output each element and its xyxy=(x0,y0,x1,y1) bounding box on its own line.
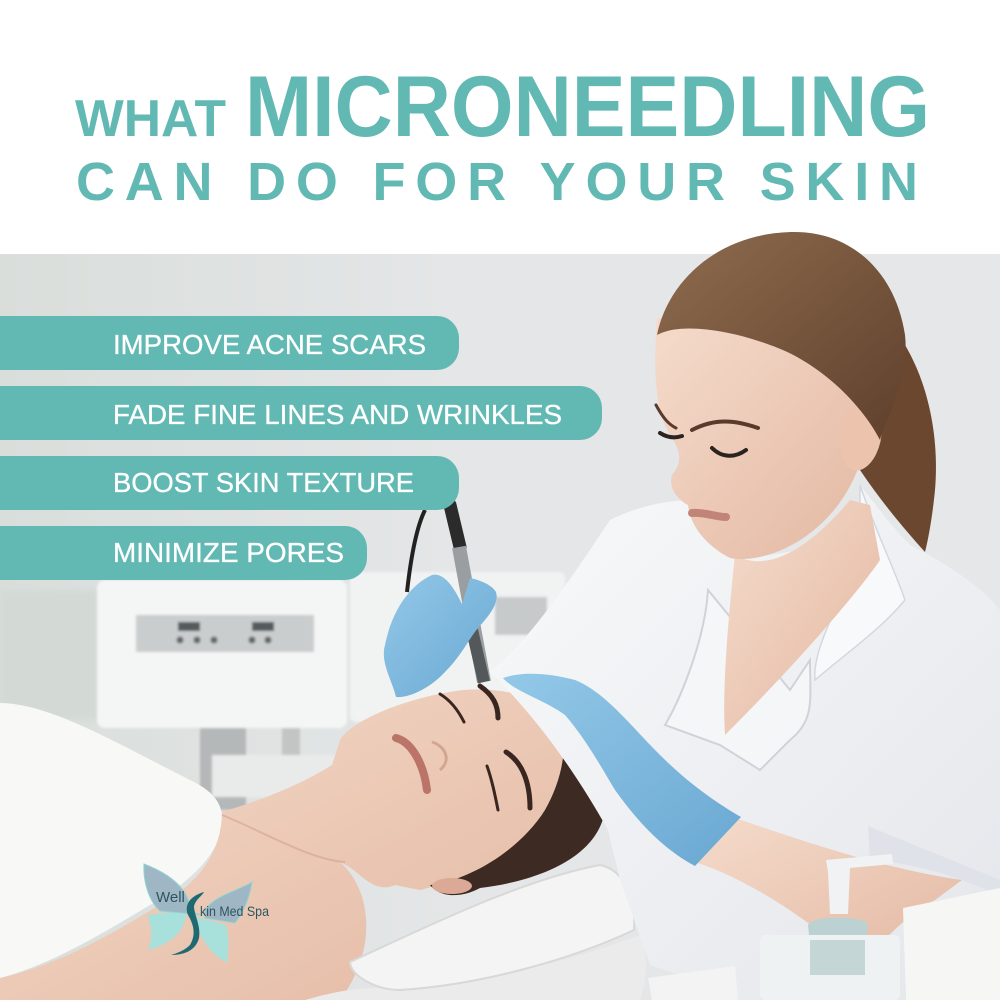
practitioner: eyes, brows and lips xyxy=(656,405,758,517)
logo: Well Skin Med Spa butterfly xyxy=(144,864,269,963)
benefit pill: boost skin texture: BOOST SKIN TEXTURE xyxy=(113,467,414,498)
patient: towel xyxy=(0,703,222,978)
benefit pill: boost skin texture xyxy=(0,456,459,510)
patient: eyes, brows and lips xyxy=(396,686,530,810)
title xyxy=(75,59,930,212)
title: MICRONEEDLING xyxy=(245,59,930,155)
benefit pill: fade fine lines and wrinkles xyxy=(0,386,602,440)
patient: body and face xyxy=(0,686,572,1000)
logo: Well Skin Med Spa butterfly: kin Med Spa xyxy=(200,903,269,919)
practitioner: face xyxy=(655,318,888,559)
photo: treatment scene xyxy=(0,232,1000,1000)
logo: Well Skin Med Spa butterfly: Well xyxy=(156,889,185,906)
practitioner: forearm xyxy=(695,818,962,965)
practitioner: ear xyxy=(834,400,888,474)
practitioner: neck and chest xyxy=(724,500,880,735)
benefit pill: improve acne scars xyxy=(0,316,459,370)
skincare products xyxy=(648,854,1000,1000)
title: CAN DO FOR YOUR SKIN xyxy=(76,152,918,212)
patient: ear xyxy=(432,878,472,894)
practitioner: white coat xyxy=(490,485,1000,1000)
benefit pill: improve acne scars: IMPROVE ACNE SCARS xyxy=(113,329,426,360)
title: WHAT xyxy=(75,90,226,148)
practitioner: right glove on forehead xyxy=(503,674,741,866)
pillow xyxy=(305,865,646,1000)
practitioner: left glove holding pen xyxy=(384,575,497,697)
microneedling pen xyxy=(407,505,484,682)
benefit pill: minimize pores: MINIMIZE PORES xyxy=(113,537,344,568)
practitioner: hair xyxy=(657,232,906,440)
benefit pill: fade fine lines and wrinkles: FADE FINE LINES AND WRINKLES xyxy=(113,399,562,430)
benefit pill: minimize pores xyxy=(0,526,367,580)
equipment: aesthetic machines xyxy=(97,572,565,810)
patient: hair xyxy=(430,704,605,895)
practitioner: ponytail xyxy=(860,330,936,552)
